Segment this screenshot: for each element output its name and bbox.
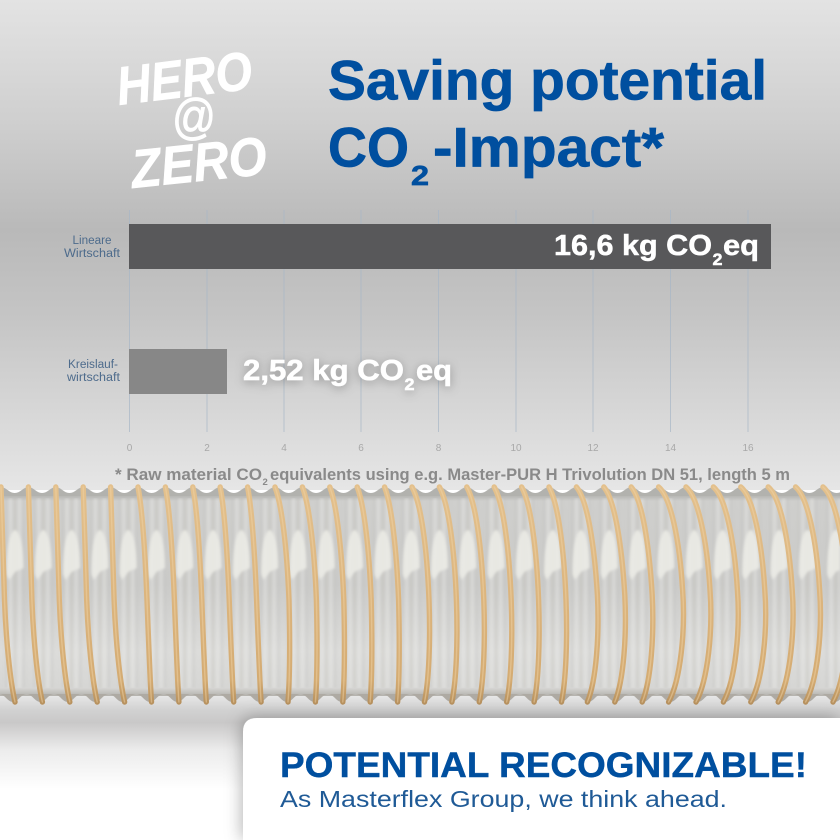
title: CO <box>328 116 409 178</box>
row label: Lineare Wirtschaft: Lineare <box>72 235 112 247</box>
shadow below hose <box>0 695 840 840</box>
grid lines and axis values <box>127 210 754 454</box>
title <box>328 48 767 191</box>
grid lines and axis values: 2 <box>204 443 210 454</box>
hose wire spiral <box>1 487 840 702</box>
title: -Impact* <box>433 116 664 178</box>
footnote: * Raw material CO <box>115 465 262 484</box>
row label: Kreislaufwirtschaft: wirtschaft <box>66 372 121 384</box>
footnote: equivalents using e.g. Master-PUR H Trivolution DN 51, length 5 m <box>270 465 790 484</box>
bar value: 2,52 kg CO2eq: 2,52 kg CO <box>243 355 404 387</box>
footnote <box>115 465 790 488</box>
row label: Lineare Wirtschaft: Wirtschaft <box>64 248 121 260</box>
bar value: 16,6 kg CO2eq: eq <box>723 230 759 262</box>
grid lines and axis values: 12 <box>587 443 599 454</box>
callout card <box>243 718 840 840</box>
row label: Kreislaufwirtschaft: Kreislauf- <box>68 359 118 371</box>
grid lines and axis values: 14 <box>665 443 676 454</box>
grid lines and axis values: 6 <box>358 443 364 454</box>
bar value: 16,6 kg CO2eq: 16,6 kg CO <box>554 230 712 262</box>
row label: Lineare Wirtschaft <box>64 235 121 260</box>
title: 2 <box>411 160 429 191</box>
bar: Kreislaufwirtschaft <box>129 349 227 394</box>
hose photo illustration <box>0 487 840 703</box>
bar: Lineare Wirtschaft <box>129 224 771 269</box>
grid lines and axis values: 10 <box>510 443 522 454</box>
logo: Hero @ Zero: ZERO <box>126 126 270 200</box>
callout heading: POTENTIAL RECOGNIZABLE! <box>280 746 807 785</box>
grid lines and axis values: 8 <box>436 443 442 454</box>
bar value: 16,6 kg CO2eq <box>554 230 759 269</box>
logo: Hero @ Zero <box>113 41 270 200</box>
logo: Hero @ Zero: HERO <box>113 41 255 117</box>
footnote: 2 <box>262 477 268 488</box>
grid lines and axis values: 16 <box>742 443 754 454</box>
logo: Hero @ Zero: @ <box>172 89 216 145</box>
bar value: 2,52 kg CO2eq: eq <box>416 355 452 387</box>
title: Saving potential <box>328 48 767 112</box>
grid lines and axis values: 0 <box>127 443 133 454</box>
bar value: 2,52 kg CO2eq: 2 <box>404 375 414 394</box>
row label: Kreislaufwirtschaft <box>66 359 121 384</box>
bar value: 2,52 kg CO2eq <box>243 355 452 394</box>
callout tagline: As Masterflex Group, we think ahead. <box>280 786 727 812</box>
bar value: 16,6 kg CO2eq: 2 <box>712 250 722 269</box>
background gradient <box>0 0 840 490</box>
bar chart <box>64 210 771 454</box>
grid lines and axis values: 4 <box>281 443 287 454</box>
